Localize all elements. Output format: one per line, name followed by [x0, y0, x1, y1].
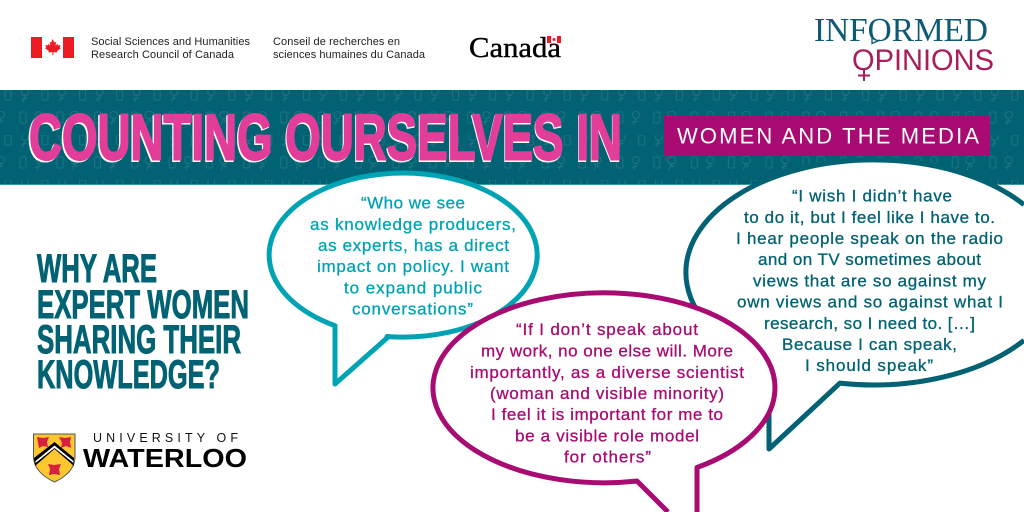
- quote text: light teal: “Who we see: [361, 194, 465, 212]
- left question heading: SHARING THEIR: [37, 318, 241, 362]
- quote text: dark teal: I should speak”: [805, 356, 933, 375]
- quote text: magenta: for others”: [564, 448, 651, 466]
- quote text: light teal: conversations”: [352, 300, 473, 318]
- logo word: Opinions: OPINIONS: [852, 44, 994, 77]
- quote text: magenta: [470, 320, 744, 466]
- logo: University of Waterloo: [34, 431, 247, 482]
- left question heading: [37, 247, 249, 397]
- speech bubble: magenta quote: [433, 293, 775, 512]
- left question heading: KNOWLEDGE?: [37, 353, 220, 397]
- subtitle tag: [664, 116, 990, 155]
- icon: Waterloo shield: [34, 434, 75, 482]
- left question heading: EXPERT WOMEN: [37, 283, 249, 327]
- French council name: Conseil de recherches en: [273, 36, 400, 48]
- quote text: magenta: I feel it is important for me to: [491, 405, 723, 424]
- quote text: dark teal: [736, 186, 1003, 375]
- title: [28, 100, 622, 175]
- French council name: sciences humaines du Canada: [273, 49, 426, 61]
- quote text: dark teal: Because I can speak,: [782, 335, 957, 354]
- banner: [0, 90, 1024, 185]
- quote text: light teal: as knowledge producers,: [310, 215, 516, 234]
- quote text: dark teal: research, so I need to. […]: [764, 314, 975, 333]
- Canada wordmark: Canada: [469, 32, 561, 64]
- quote text: magenta: importantly, as a diverse scientist: [470, 363, 744, 382]
- speech bubble: light teal quote: [269, 173, 537, 384]
- title: COUNTING OURSELVES IN: [29, 100, 622, 174]
- English council name: Research Council of Canada: [91, 49, 235, 61]
- quote text: dark teal: views that are so against my: [753, 272, 986, 290]
- title: COUNTING OURSELVES IN: [28, 102, 622, 175]
- icon: speech tail on the O: [872, 36, 880, 44]
- quote text: magenta: (woman and visible minority): [490, 384, 724, 403]
- quote text: magenta: be a visible role model: [515, 426, 699, 446]
- icon: Canadian flag: [31, 37, 74, 58]
- wordmark line: University of: UNIVERSITY OF: [93, 431, 238, 445]
- quote text: light teal: [310, 194, 516, 318]
- quote text: dark teal: and on TV sometimes about: [758, 250, 981, 269]
- left question heading: WHY ARE: [37, 247, 157, 291]
- quote text: dark teal: I hear people speak on the radio: [736, 229, 1003, 248]
- wordmark line: Waterloo: WATERLOO: [83, 443, 247, 473]
- quote text: light teal: impact on policy. I want: [317, 257, 509, 276]
- icon: female symbol stem on the O: [858, 70, 870, 81]
- logo word: Informed: INFORMED: [814, 12, 988, 49]
- quote text: dark teal: “I wish I didn’t have: [792, 186, 952, 206]
- English council name: Social Sciences and Humanities: [91, 36, 250, 48]
- subtitle tag: WOMEN AND THE MEDIA: [677, 124, 979, 148]
- quote text: magenta: “If I don’t speak about: [516, 320, 698, 339]
- speech bubble: dark teal quote: [686, 160, 1024, 449]
- quote text: dark teal: to do it, but I feel like I have to.: [744, 208, 995, 227]
- quote text: magenta: my work, no one else will. More: [481, 342, 733, 360]
- logo: Informed Opinions: [814, 12, 994, 81]
- header: SSHRC federal identity: [31, 32, 561, 64]
- quote text: dark teal: own views and so against what I: [737, 292, 1003, 312]
- quote text: light teal: to expand public: [344, 278, 482, 298]
- quote text: light teal: as experts, has a direct: [318, 236, 509, 255]
